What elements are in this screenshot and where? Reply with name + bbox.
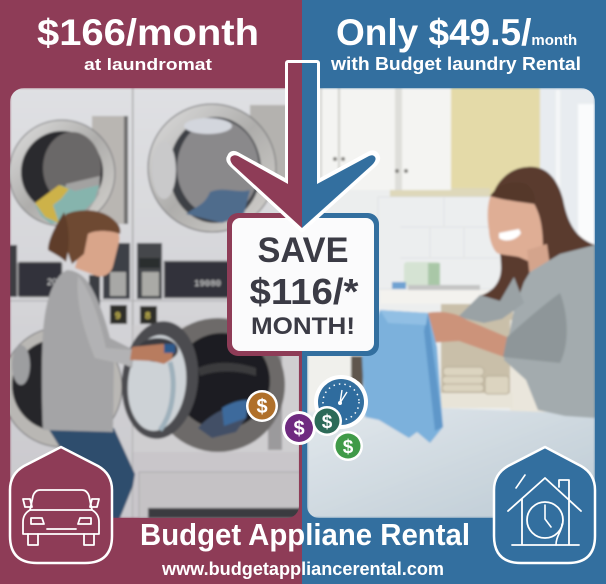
icon: orange dollar coin [246, 390, 278, 422]
icon: teal dollar coin: $ [322, 412, 333, 433]
sink items [392, 262, 480, 292]
heading: laundromat cost: $166/month [37, 12, 259, 53]
washer: top-right drum [148, 104, 300, 232]
control panels [10, 243, 230, 324]
wall [451, 88, 543, 196]
heading: rental cost: with Budget laundry Rental [330, 53, 581, 74]
heading: rental cost: Only $49.5/month [336, 12, 577, 53]
icon: orange dollar coin: $ [256, 396, 268, 418]
tiles [378, 197, 545, 289]
washer: bottom-right drum with open door [120, 316, 286, 454]
woman at washer [42, 210, 175, 518]
cabinets [307, 88, 451, 190]
control panels: 19080 [194, 279, 221, 289]
icon: purple dollar coin [282, 411, 316, 445]
text: website: www.budgetappliancerental.com [161, 559, 444, 579]
arrow: down arrow with two colours [229, 63, 377, 229]
background: maroon side [0, 0, 302, 584]
icon: clock [314, 375, 368, 429]
lower cabinet panel [133, 452, 300, 518]
callout: save badge [227, 213, 379, 356]
washer: top-left drum [9, 116, 128, 226]
washer: bottom-left drum [2, 327, 122, 447]
icon: green dollar coin: $ [343, 437, 354, 458]
icon: car badge [10, 447, 112, 563]
control panels: 8 [145, 311, 151, 322]
control panels: 9 [115, 311, 121, 322]
callout text: $116/* [250, 271, 358, 312]
background: blue side [302, 0, 606, 584]
stacked plates [442, 367, 509, 394]
panel: kitchen photo [307, 88, 595, 518]
icon: house badge [494, 447, 595, 563]
table [307, 408, 595, 518]
control panels: 20 [47, 277, 57, 287]
blue towel [362, 310, 443, 443]
woman folding towel [427, 167, 595, 418]
callout text: SAVE [258, 231, 348, 270]
icon: purple dollar coin: $ [293, 418, 305, 440]
callout text: MONTH! [251, 313, 355, 340]
heading: laundromat cost [37, 12, 259, 74]
heading: laundromat cost: at laundromat [84, 55, 212, 74]
icon: teal dollar coin [312, 406, 342, 436]
icon: green dollar coin [333, 431, 363, 461]
callout text [250, 231, 358, 340]
title: brand name: Budget Appliane Rental [140, 517, 470, 552]
window [538, 88, 544, 171]
panel: laundromat photo [2, 88, 300, 518]
heading: rental cost [330, 12, 581, 74]
counter [406, 289, 482, 294]
